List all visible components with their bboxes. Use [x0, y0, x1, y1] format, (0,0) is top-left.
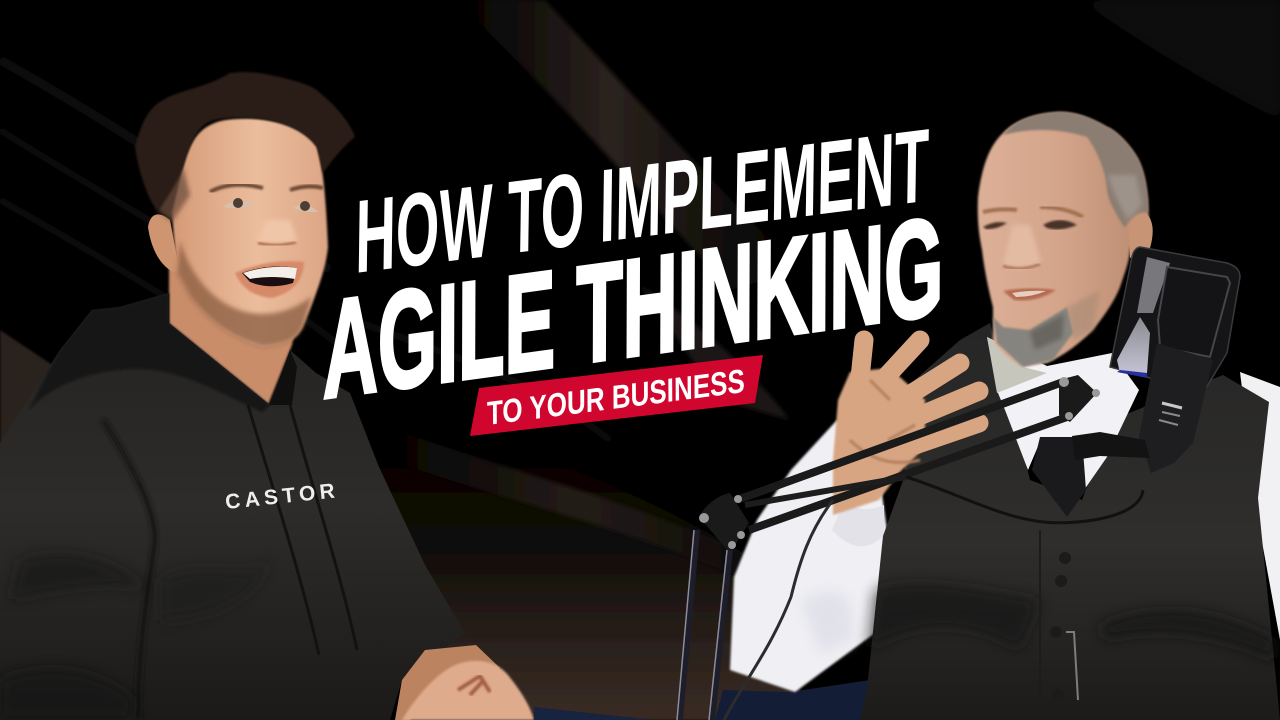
poles — [680, 530, 730, 720]
head — [978, 112, 1150, 367]
microphone label — [1159, 403, 1182, 425]
jeans — [534, 707, 654, 720]
eyes — [223, 201, 318, 212]
ear — [1128, 213, 1153, 258]
goatee — [993, 307, 1073, 367]
ear — [148, 214, 180, 274]
right shirt sleeve — [1240, 372, 1280, 640]
waistcoat shading and buttons — [868, 530, 1275, 720]
waistcoat — [860, 323, 1280, 720]
banner text: TO YOUR BUSINESS — [487, 363, 745, 433]
left shirt sleeve — [730, 420, 887, 692]
hair fade — [157, 167, 190, 222]
boom arm — [677, 375, 1150, 720]
neck — [169, 265, 300, 405]
eyebrows — [210, 185, 323, 192]
hood shading and sleeve folds — [29, 293, 270, 412]
shirt collar and front — [987, 337, 1139, 493]
eyebrows — [983, 207, 1083, 217]
trouser — [715, 680, 870, 720]
mouth — [1003, 288, 1056, 301]
nose — [1003, 225, 1041, 268]
lips — [235, 261, 304, 298]
hair — [135, 72, 355, 210]
mic clamp — [1072, 432, 1150, 460]
grey hair — [1003, 112, 1148, 228]
boom joints — [699, 493, 749, 553]
eyes — [983, 220, 1077, 229]
stubble — [177, 240, 312, 347]
tie — [1032, 437, 1086, 517]
hoodie drawstrings — [248, 405, 357, 655]
mouth — [242, 266, 297, 286]
left person: host in black hoodie — [0, 72, 654, 720]
pop filter screen — [1137, 257, 1170, 313]
face — [172, 118, 328, 347]
hoodie logo: CASTOR — [224, 480, 336, 514]
microphone head — [1158, 267, 1230, 357]
microphone body — [1139, 343, 1213, 473]
red banner — [470, 355, 763, 436]
hoodie — [0, 293, 465, 720]
forearm and clasped hands — [395, 645, 500, 720]
right person: guest in waistcoat — [677, 112, 1280, 720]
cables — [906, 477, 1143, 523]
nose — [257, 220, 297, 244]
gesturing hand — [833, 340, 979, 515]
teeth — [243, 267, 297, 279]
stubble — [1067, 290, 1100, 340]
microphone pop filter — [1110, 247, 1240, 393]
